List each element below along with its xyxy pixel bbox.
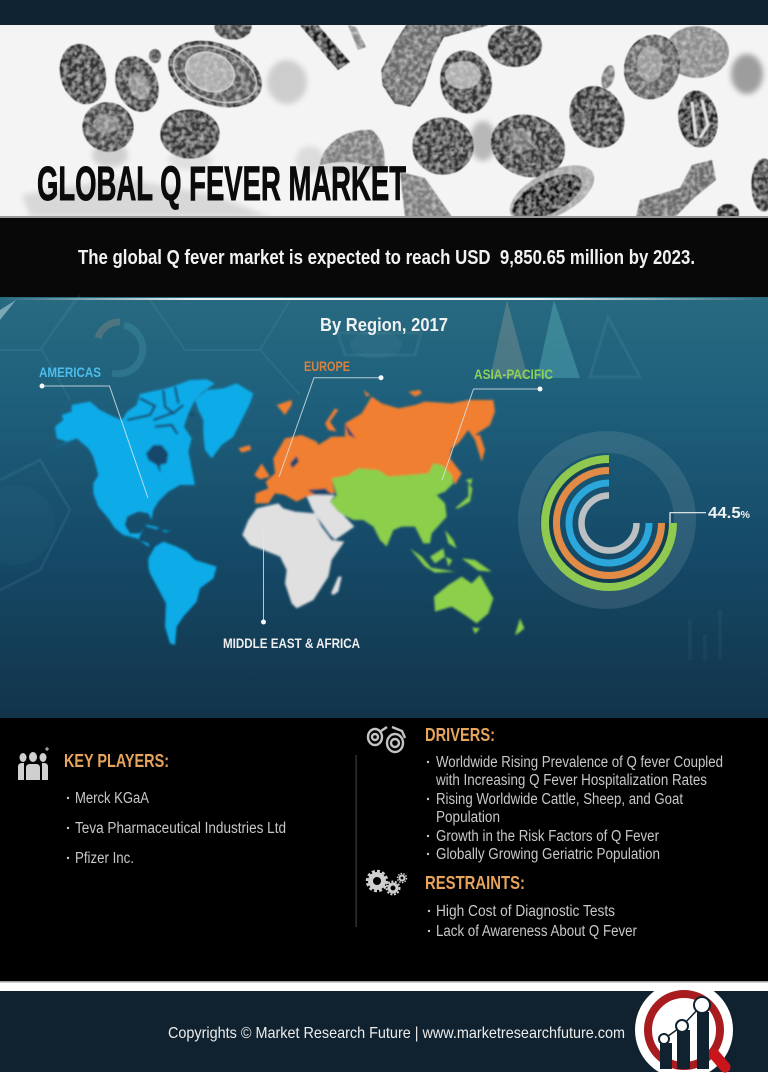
heading: restraints: RESTRAINTS: xyxy=(425,873,525,893)
top navy band xyxy=(0,0,768,25)
header photo: bacteria micrograph xyxy=(0,25,768,216)
label: middle east and africa: MIDDLE EAST & AFRICA xyxy=(223,635,360,651)
panel: regional map xyxy=(0,295,768,718)
value: 44.5%: 44.5% xyxy=(708,505,750,522)
icon: gears xyxy=(367,871,406,894)
region: americas xyxy=(47,379,253,645)
drivers list xyxy=(427,754,723,863)
restraints list: Lack of Awareness About Q Fever xyxy=(436,923,637,940)
callout dots xyxy=(40,375,542,624)
key players list: Teva Pharmaceutical Industries Ltd xyxy=(75,820,286,837)
logo xyxy=(635,990,733,1072)
restraints list: High Cost of Diagnostic Tests xyxy=(436,903,615,920)
panel: market details xyxy=(0,718,768,981)
drivers list: Worldwide Rising Prevalence of Q fever Coupled xyxy=(436,754,723,771)
key players list: Pfizer Inc. xyxy=(75,850,134,867)
footer strip xyxy=(0,981,768,1086)
key players list: Merck KGaA xyxy=(75,790,150,807)
divider xyxy=(356,755,357,927)
callout lines xyxy=(42,378,540,622)
heading: drivers: DRIVERS: xyxy=(425,725,495,745)
restraints list xyxy=(428,903,637,940)
radial bar chart xyxy=(529,442,706,598)
title: GLOBAL Q FEVER MARKET xyxy=(37,158,406,211)
drivers list: Globally Growing Geriatric Population xyxy=(436,846,660,863)
region: europe xyxy=(238,390,495,503)
key players list xyxy=(67,790,286,867)
region: asia-pacific xyxy=(330,463,524,635)
copyright text: Copyrights © Market Research Future | www.marketresearchfuture.com xyxy=(168,1025,625,1042)
world map xyxy=(47,379,524,645)
drivers list: with Increasing Q Fever Hospitalization Rates xyxy=(435,772,707,789)
black headline band xyxy=(0,216,768,297)
heading: by region: By Region, 2017 xyxy=(320,315,448,335)
label: asia-pacific: ASIA-PACIFIC xyxy=(474,366,553,382)
icon: people xyxy=(18,747,49,780)
label: americas: AMERICAS xyxy=(39,364,101,380)
region: middle east and africa xyxy=(242,495,354,608)
drivers list: Population xyxy=(436,809,500,826)
heading: key players: KEY PLAYERS: xyxy=(64,751,169,771)
label: europe: EUROPE xyxy=(304,358,350,374)
icon: handcuffs xyxy=(368,727,405,752)
drivers list: Rising Worldwide Cattle, Sheep, and Goat xyxy=(436,791,684,808)
drivers list: Growth in the Risk Factors of Q Fever xyxy=(436,828,659,845)
